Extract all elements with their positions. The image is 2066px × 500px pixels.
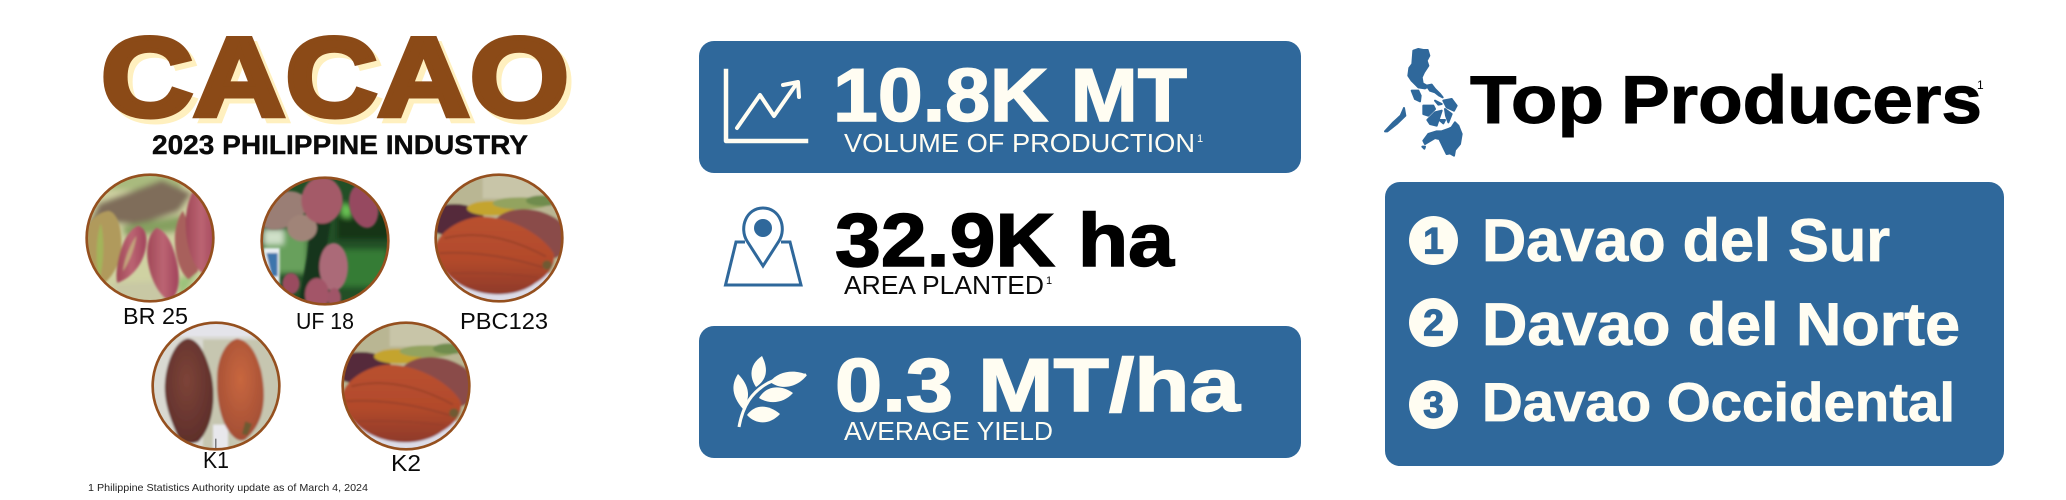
label: UF 18: UF 18 [296, 308, 354, 334]
icon: Philippines map [1385, 49, 1462, 156]
photo: K2 cacao pods [341, 321, 471, 451]
title: CACAO [106, 20, 574, 145]
icon: line chart [726, 71, 806, 141]
rank 1: Davao del Sur [1482, 207, 1890, 274]
stat label: average yield: AVERAGE YIELD [844, 416, 1053, 446]
heading: Top Producers [1470, 62, 1982, 138]
rank 3: 3 [1423, 384, 1444, 426]
heading: Top Producers: Producers [1621, 62, 1982, 138]
title: CACAO [101, 15, 569, 140]
rank 3: Davao Occidental [1482, 371, 1955, 433]
photo: UF 18 cacao pods [260, 176, 390, 306]
label: K2: K2 [391, 450, 421, 476]
icon: leaf branch [733, 356, 807, 427]
footnote mark: 1 [1197, 133, 1203, 145]
stat value: 10.8K MT: 10.8K MT [833, 53, 1187, 137]
stat label: area planted: AREA PLANTED [844, 270, 1044, 300]
panel: area planted [726, 198, 1175, 300]
rank 2: Davao del Norte [1482, 291, 1960, 358]
footnote: 1 Philippine Statistics Authority update as of March 4, 2024 [88, 482, 368, 494]
panel: top producers list [1385, 182, 2004, 466]
label: PBC123: PBC123 [460, 308, 548, 334]
rank 2: 2 [1423, 302, 1444, 344]
photo: K1 cacao pods [148, 318, 284, 454]
stat value: 32.9K ha: 32.9K ha [835, 198, 1175, 282]
footnote mark: 1 [1046, 275, 1052, 287]
panel: average yield [699, 326, 1301, 458]
stat label: volume of production: VOLUME OF PRODUCTION [844, 128, 1195, 158]
label: BR 25: BR 25 [123, 303, 188, 329]
footnote mark: 1 [1977, 78, 1984, 92]
photo: PBC123 cacao pods [434, 173, 564, 303]
stat value: 0.3 MT/ha [835, 343, 1242, 427]
label: K1: K1 [203, 447, 229, 473]
icon: map pin [726, 208, 801, 285]
rank 1: 1 [1423, 220, 1444, 262]
photo: BR 25 cacao pods [82, 170, 218, 306]
heading: Top Producers: Top [1470, 62, 1604, 138]
panel: volume of production [699, 41, 1301, 173]
subtitle: 2023 PHILIPPINE INDUSTRY [152, 130, 528, 160]
stat value: 0.3 MT/ha: 0.3 [835, 343, 953, 427]
stat value: 0.3 MT/ha: MT/ha [978, 343, 1242, 427]
